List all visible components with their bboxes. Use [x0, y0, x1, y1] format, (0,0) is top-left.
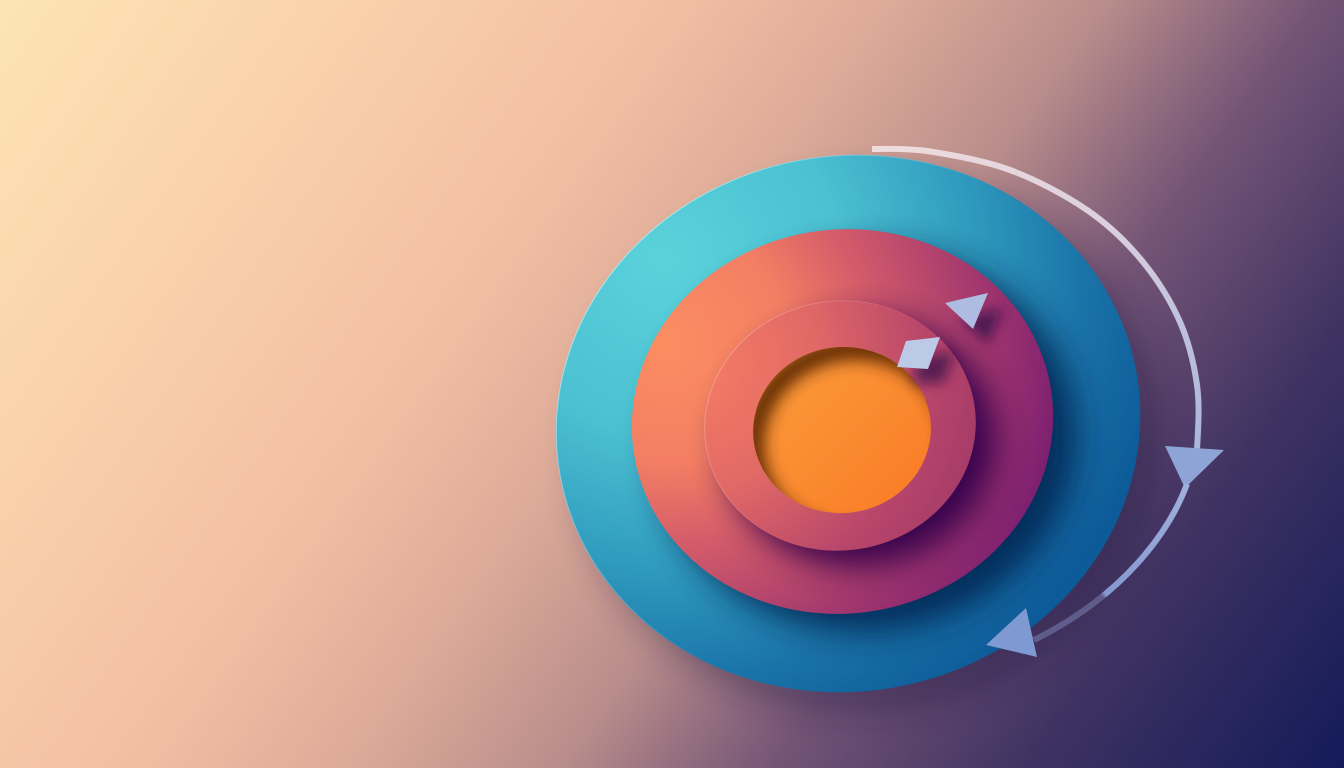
inner ring rim highlight: [688, 283, 992, 568]
outer layer rim highlight: [513, 109, 1183, 738]
arrow: lower clockwise arc: [986, 484, 1187, 657]
icon: diamond marker: [897, 337, 955, 384]
outer teal layer: [513, 109, 1183, 738]
inner ring: [688, 283, 992, 568]
middle coral-to-purple layer: [607, 202, 1078, 641]
middle layer shadow: [630, 221, 1102, 659]
concentric circle diagram: [556, 154, 1164, 722]
arrow: upper clockwise arc: [872, 149, 1224, 488]
icon: triangle marker: [945, 293, 1003, 344]
arrowhead: right: [1165, 446, 1224, 488]
inner ring shadow: [708, 299, 1012, 585]
arrowhead: bottom: [986, 608, 1037, 657]
outer layer shadow: [533, 130, 1203, 760]
orange core: [753, 346, 931, 514]
